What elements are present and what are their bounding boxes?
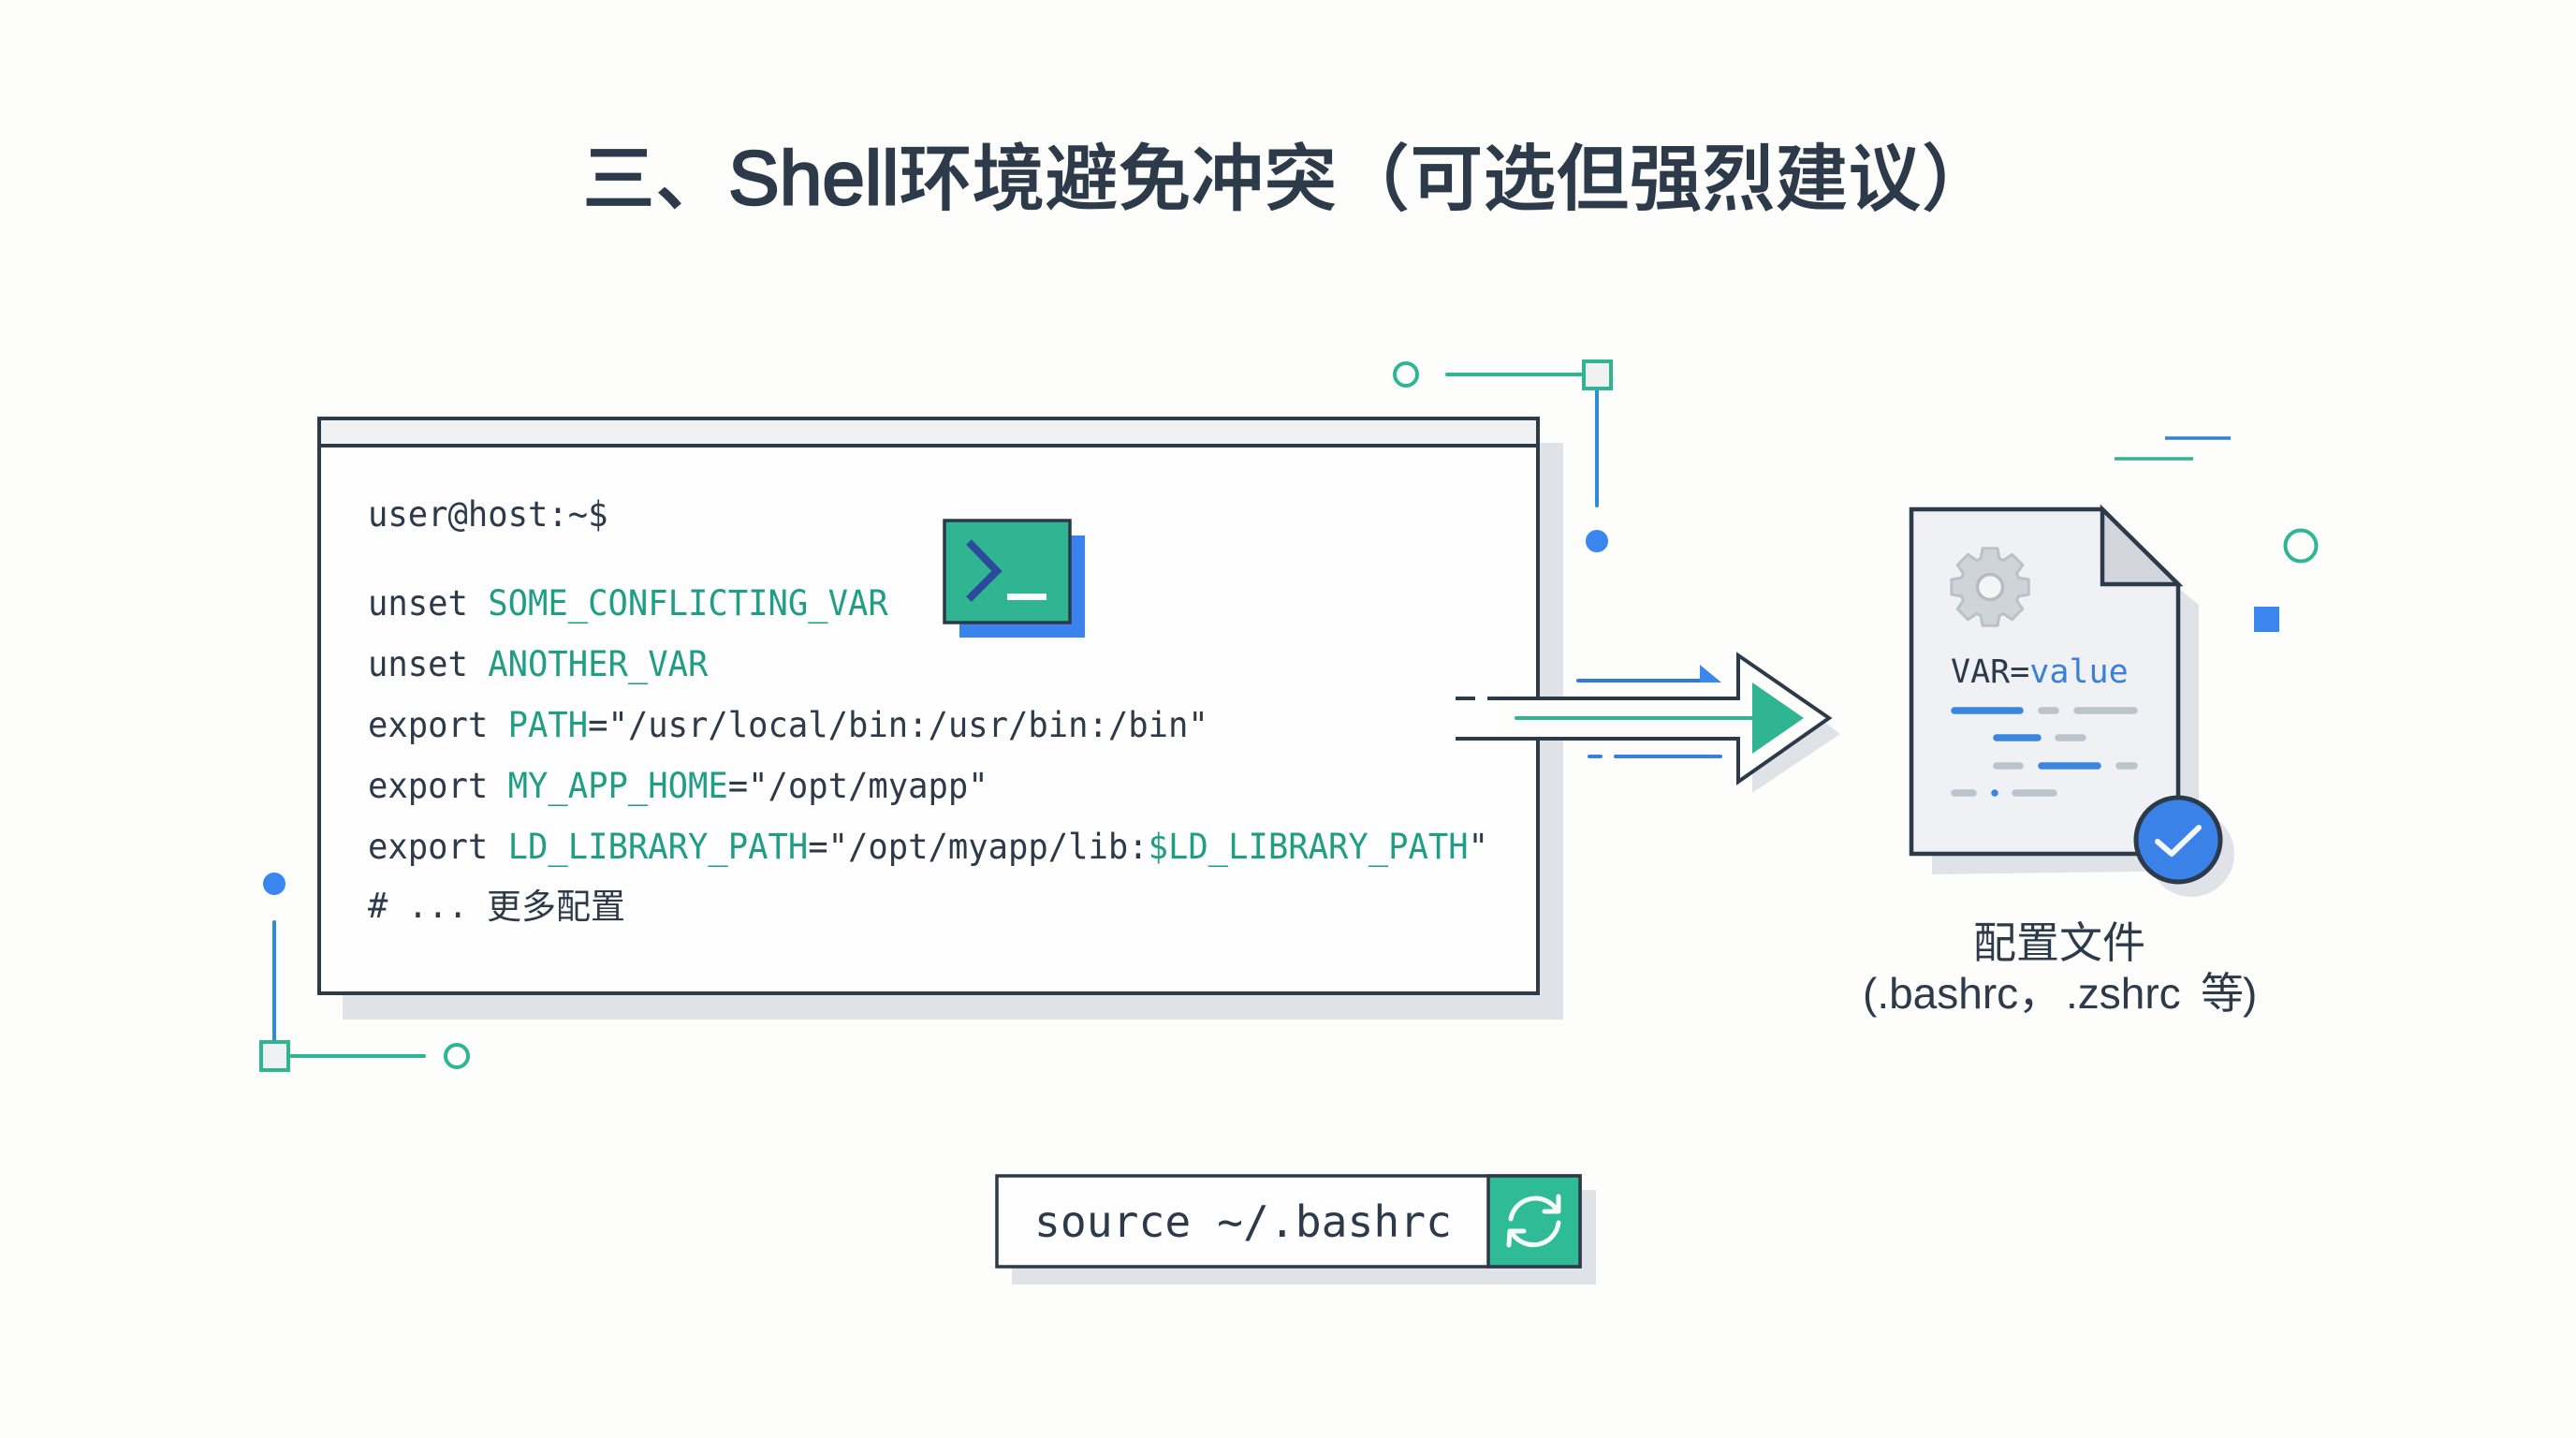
terminal code lines: export LD_LIBRARY_PATH="/opt/myapp/lib:$LD_LIBRARY_PATH" <box>368 826 1488 867</box>
text: config file label: .zshrc <box>2066 969 2181 1018</box>
text: source command: source ~/.bashrc <box>1034 1196 1452 1247</box>
text: config file label <box>1863 909 2257 1018</box>
terminal code lines: export PATH="/usr/local/bin:/usr/bin:/bin" <box>368 704 1208 745</box>
panel: terminal window <box>319 418 1563 1020</box>
icon: terminal prompt <box>944 521 1085 638</box>
text: config file label: 配置文件 <box>1973 909 2145 971</box>
decoration: blue square <box>2254 607 2279 632</box>
terminal code lines: unset SOME_CONFLICTING_VAR <box>368 582 888 624</box>
text: VAR=value: VAR=value <box>1951 653 2129 691</box>
icon: refresh button <box>1488 1176 1580 1267</box>
decoration: teal ring <box>2286 530 2316 562</box>
terminal code lines: user@host:~$ <box>368 493 608 535</box>
connector decoration: top right of terminal <box>1395 361 1611 552</box>
terminal code lines: # ... <box>368 885 468 926</box>
panel: source command box <box>997 1176 1596 1284</box>
terminal code lines <box>368 493 1488 929</box>
config lines placeholder bars <box>1954 711 2134 793</box>
terminal code lines: unset ANOTHER_VAR <box>368 643 709 684</box>
title: 三、Shell环境避免冲突（可选但强烈建议） <box>582 136 1994 221</box>
terminal code lines: export MY_APP_HOME="/opt/myapp" <box>368 765 988 806</box>
text: config file label: 等 <box>2201 969 2244 1018</box>
arrow: terminal to config file <box>1456 655 1840 793</box>
text: config file label: ) <box>2243 969 2257 1018</box>
text: config file label: (.bashrc， <box>1863 969 2061 1018</box>
icon: check badge <box>2136 798 2220 882</box>
panel: config file document <box>1911 509 2234 897</box>
terminal code lines: 更多配置 <box>487 878 625 929</box>
icon: gear <box>1952 549 2028 625</box>
decoration: accent lines above file <box>2115 438 2231 459</box>
connector decoration: bottom left of terminal <box>261 873 468 1070</box>
